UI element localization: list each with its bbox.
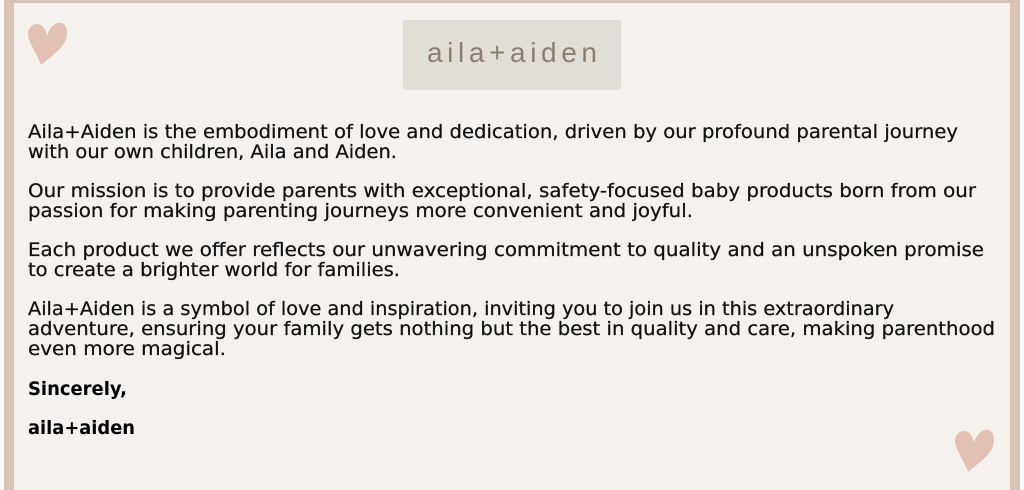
text block: paragraph 2: Our mission is to provide parents with exceptional, safety-focused baby products born from our [28, 180, 976, 202]
logo: aila+aiden badge: aila+aiden [427, 37, 597, 68]
text block: paragraph 3: Each product we offer reflects our unwavering commitment to quality and an unspoken promise [28, 239, 984, 261]
text block: paragraph 2 [28, 180, 976, 222]
text block: signature: aila+aiden [28, 417, 135, 439]
text block: paragraph 3 [28, 239, 984, 281]
text block: paragraph 1: with our own children, Aila and Aiden. [28, 141, 397, 163]
logo: aila+aiden badge [403, 20, 621, 90]
text block: sign-off: Sincerely, [28, 378, 127, 400]
text block: paragraph 4 [28, 298, 995, 360]
text block: paragraph 4: even more magical. [28, 338, 226, 360]
text block: paragraph 3: to create a brighter world for families. [28, 259, 400, 281]
text block: paragraph 4: Aila+Aiden is a symbol of love and inspiration, inviting you to join us in this extraordinary [28, 298, 894, 320]
text block: paragraph 1: Aila+Aiden is the embodiment of love and dedication, driven by our profound parental journey [28, 121, 958, 143]
text block: paragraph 4: adventure, ensuring your family gets nothing but the best in quality and care, making parenthood [28, 318, 995, 340]
text block: paragraph 1 [28, 121, 958, 163]
text block: paragraph 2: passion for making parenting journeys more convenient and joyful. [28, 200, 693, 222]
icon: heart bottom right [955, 430, 994, 472]
icon: heart top left [28, 23, 67, 65]
